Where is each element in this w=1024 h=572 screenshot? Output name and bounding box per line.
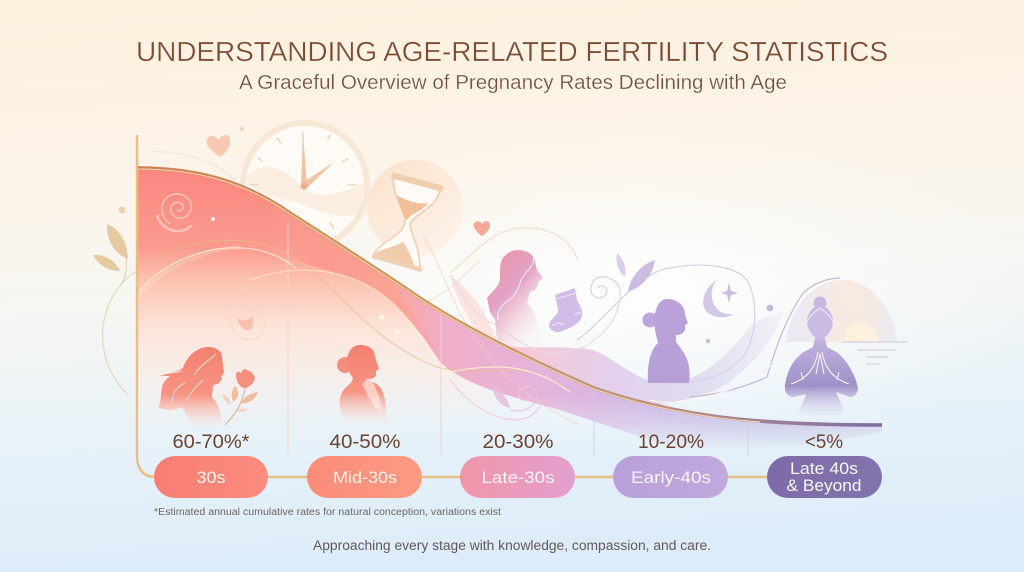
accent dot top (240, 127, 244, 131)
pill: 30s: 30s (196, 468, 226, 487)
vertical stage dividers (288, 222, 748, 455)
pill: late-30s: Late-30s (482, 468, 554, 487)
title: UNDERSTANDING AGE-RELATED FERTILITY STATISTICS (136, 36, 888, 67)
icon: left leaf sprig (93, 207, 137, 395)
icon: crescent moon (703, 280, 733, 317)
icon: spiral on coral (157, 194, 192, 231)
flowing ribbons (116, 228, 840, 425)
stat 30s: 60-70%* (172, 431, 250, 453)
stat values (172, 431, 843, 453)
footnote: *Estimated annual cumulative rates for natural conception, variations exist (154, 507, 501, 518)
icon: baby sock (549, 288, 582, 332)
thin ribbon top left (150, 152, 235, 180)
subtitle: A Graceful Overview of Pregnancy Rates Declining with Age (239, 72, 787, 94)
stat early-40s: 10-20% (638, 431, 704, 453)
sparkle dots (211, 217, 399, 334)
silhouette: woman thinking (337, 345, 387, 423)
pill: late 40s and beyond (767, 456, 882, 498)
silhouette: woman in profile (487, 250, 543, 347)
icon: four point star (721, 283, 738, 303)
icon: small spiral lower (229, 286, 265, 340)
icon: lower leaf and spiral (492, 385, 537, 411)
closing line: Approaching every stage with knowledge, compassion, and care. (313, 538, 711, 553)
stat late-30s: 20-30% (482, 431, 554, 453)
stat mid-30s: 40-50% (330, 431, 400, 453)
fertility decline curve (138, 168, 882, 425)
icon: flower (223, 369, 258, 425)
silhouette: woman in prayer pose (785, 296, 858, 415)
silhouette: woman side profile lavender (642, 299, 690, 383)
icon: heart middle (473, 221, 490, 236)
pill: early-40s (613, 456, 728, 498)
chart area: pink-lavender wave above curve (500, 312, 783, 405)
pill: mid-30s (307, 456, 422, 498)
icon: hourglass (367, 160, 463, 272)
pill: early-40s: Early-40s (631, 468, 711, 487)
silhouette: woman with flower (158, 347, 258, 427)
pill: late 40s and beyond: & Beyond (786, 477, 862, 495)
pill: late-30s (460, 456, 575, 498)
icon: spiral and leaves (591, 253, 655, 298)
axis and timeline connector (137, 135, 770, 477)
stat late 40s: <5% (805, 431, 843, 453)
pill: mid-30s: Mid-30s (333, 468, 397, 487)
icon: clock (243, 123, 367, 247)
chart area: coral band beneath curve (270, 200, 445, 362)
chart area: lavender fill (383, 273, 882, 449)
icon: sunset halo (786, 280, 908, 364)
pill: late 40s and beyond: Late 40s (790, 460, 858, 478)
pale wedge behind profile woman (450, 275, 497, 345)
icon: heart top (207, 135, 230, 157)
accent dots (706, 305, 773, 343)
pill: 30s (154, 456, 268, 498)
chart area: coral fill (138, 168, 490, 440)
